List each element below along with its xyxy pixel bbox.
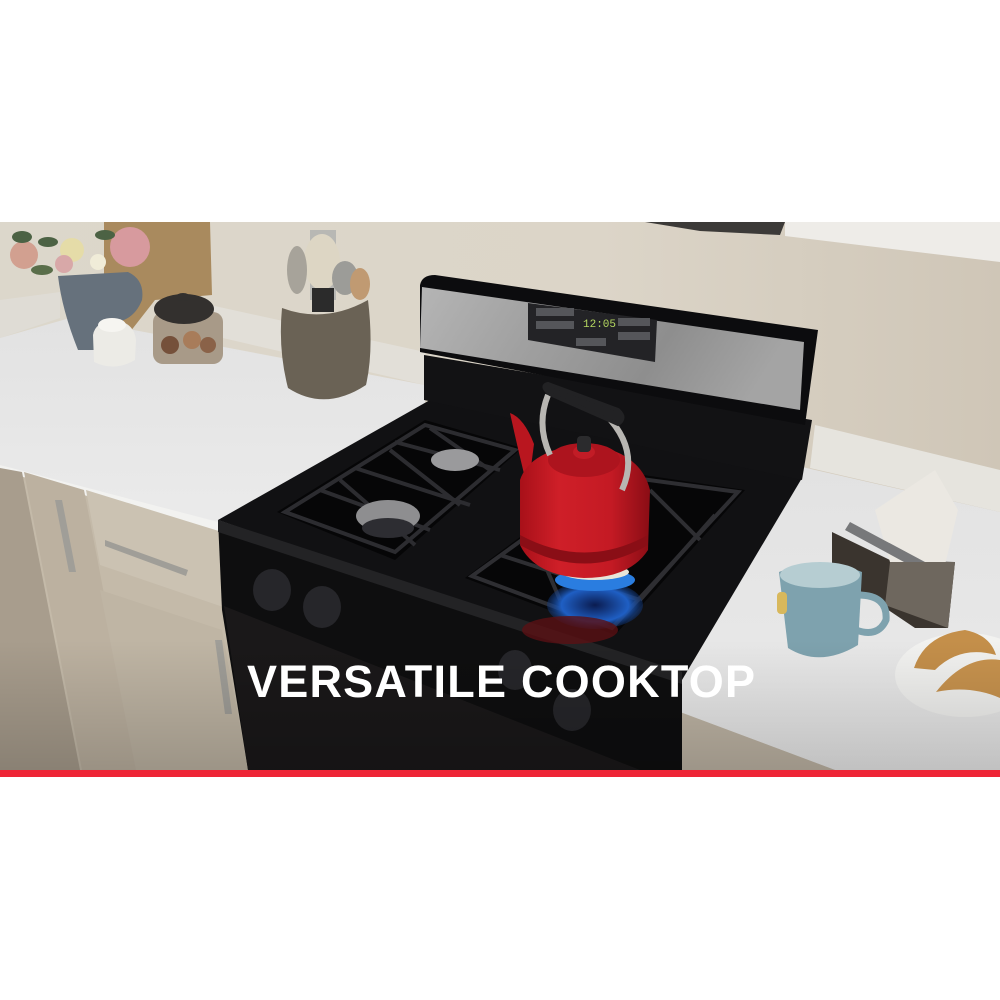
left countertop (0, 318, 425, 530)
cutting board (104, 222, 212, 332)
glass cookie jar (153, 293, 223, 364)
utensils (287, 230, 370, 312)
tea box (832, 470, 958, 628)
backguard (420, 275, 818, 480)
left cabinets (0, 468, 250, 770)
wall (0, 222, 1000, 770)
cooktop (218, 400, 802, 680)
knobs (253, 569, 591, 731)
plate and croissants (895, 630, 1000, 717)
upper cabinet (645, 222, 1000, 262)
range front (218, 520, 682, 770)
control display (528, 303, 657, 362)
handle arms (542, 395, 628, 490)
spout (510, 413, 534, 490)
right grate (465, 470, 745, 635)
cabinet handle: drawer (105, 540, 188, 576)
blue mug (777, 562, 886, 657)
left burners and grate (277, 420, 522, 560)
photo: kitchen range (0, 222, 1000, 770)
right countertop (660, 462, 1000, 770)
backsplash right (810, 425, 1000, 512)
crock (281, 300, 371, 399)
red kettle (510, 384, 650, 578)
control display: 12:05 (583, 319, 616, 331)
burner flame (522, 564, 643, 644)
cabinet handle: lower door (215, 640, 232, 714)
small white jar (93, 318, 136, 367)
title: VERSATILE COOKTOP (247, 656, 755, 707)
handle grip (544, 384, 622, 424)
cabinet handle: door (55, 500, 76, 572)
bottom shade (0, 640, 1000, 770)
lid (548, 443, 620, 477)
kettle body (520, 444, 650, 578)
vase of flowers (10, 227, 150, 350)
backsplash left (210, 305, 425, 385)
red rule (0, 770, 1000, 777)
